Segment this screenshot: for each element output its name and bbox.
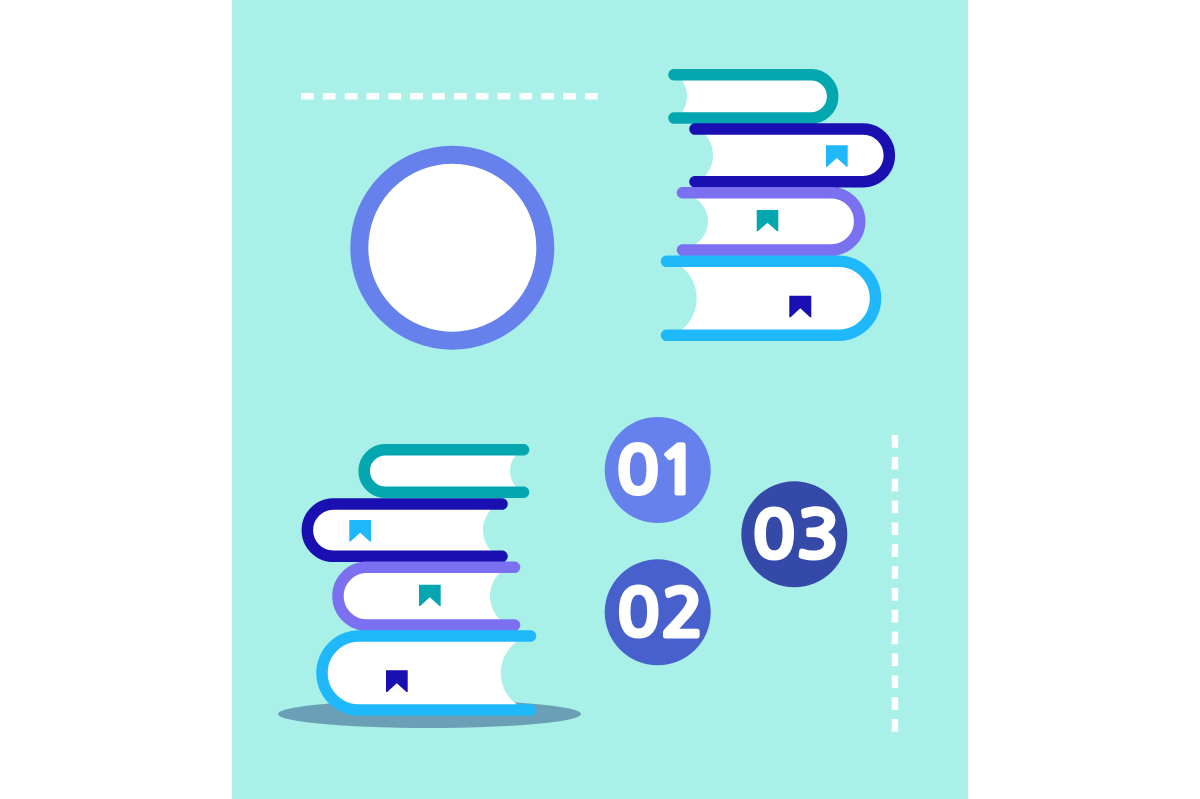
number badge 03: 03 (752, 504, 840, 569)
book: teal (364, 450, 524, 492)
shadow under bottom stack (278, 700, 581, 728)
number badge 01 (605, 417, 711, 523)
book: purple (338, 567, 514, 625)
book: navy (695, 129, 889, 182)
panel: background (232, 0, 968, 799)
icon: bookmark (757, 210, 778, 231)
number badge 01: 01 (616, 440, 697, 504)
dashed line: right (892, 435, 898, 732)
book: purple (682, 193, 860, 250)
icon: bookmark (789, 296, 811, 317)
number badge 02: 02 (617, 582, 704, 647)
book: navy (307, 504, 502, 556)
icon: bookmark (419, 585, 441, 606)
icon: bookmark (826, 145, 848, 167)
book: teal (674, 75, 833, 118)
book: blue (322, 636, 530, 710)
number badge 03 (741, 481, 847, 587)
book stack: bottom left (307, 450, 530, 710)
book stack: top right (666, 75, 889, 335)
icon: bookmark (386, 670, 408, 692)
dashed line: top (301, 93, 598, 100)
book: blue (666, 261, 876, 335)
icon: bookmark (349, 520, 371, 542)
number badge 02 (605, 559, 711, 665)
circle: empty ring (359, 155, 545, 341)
